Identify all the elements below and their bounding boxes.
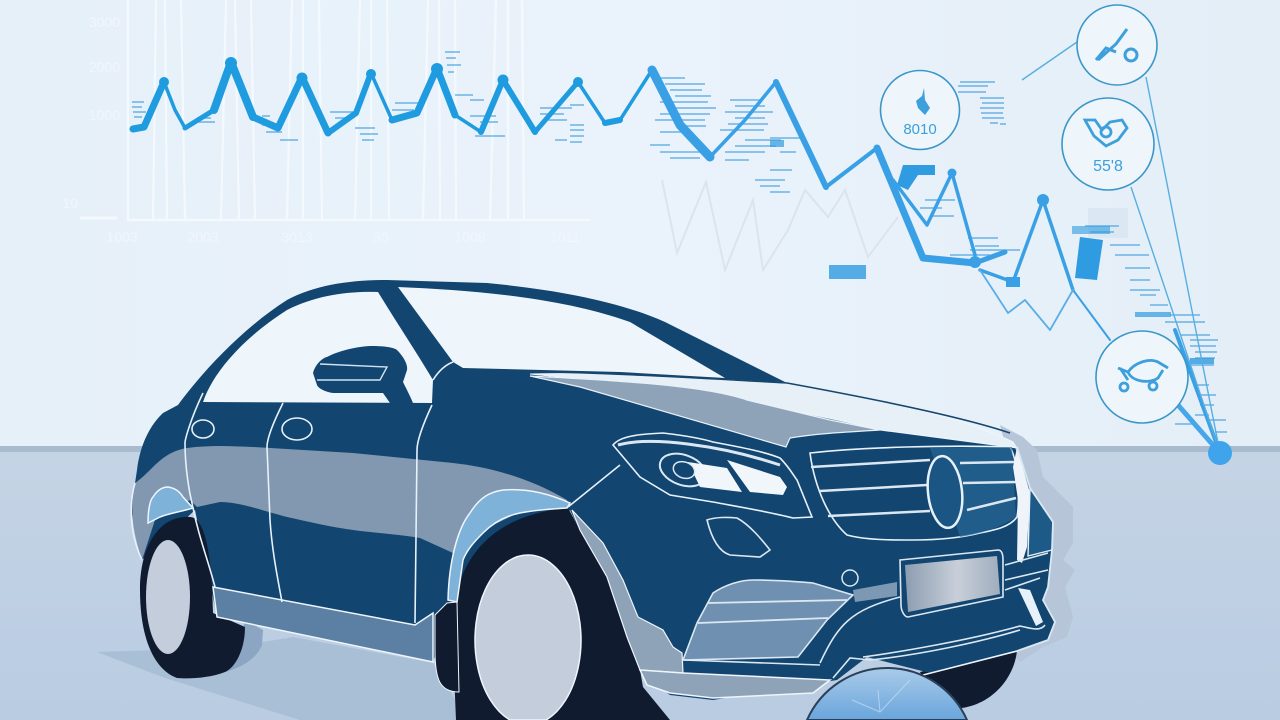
main declining line chart (133, 57, 1220, 453)
grille bars (811, 460, 1016, 516)
ghost line chart (662, 180, 898, 270)
callout circle: car underside (1096, 331, 1188, 423)
hood white (530, 374, 1017, 448)
chart: x axis labels: 1003 (106, 229, 138, 245)
front inner tire (435, 602, 459, 692)
sill (213, 587, 433, 662)
lower air intake (683, 580, 853, 660)
corner reflector (1018, 588, 1043, 626)
callout circle: wrench (1077, 5, 1157, 85)
chart: grid spikes and axes (80, 0, 590, 220)
hood gray (530, 376, 880, 447)
chart: y axis labels: 10 (62, 195, 78, 211)
peak markers (159, 57, 1049, 287)
chart: x axis labels (106, 229, 580, 245)
callout text: 8010 (903, 121, 937, 138)
grille highlight (930, 447, 1016, 537)
car (131, 280, 1055, 720)
front lower lip (640, 670, 830, 698)
license plate (900, 550, 1003, 617)
secondary line (893, 173, 975, 255)
lens highlight (852, 680, 910, 712)
chart: y axis labels: 1000 (89, 107, 120, 123)
rear quarter window (203, 292, 433, 403)
leader lines (1022, 42, 1220, 453)
floor (0, 446, 1280, 720)
icon: wrench (1096, 29, 1137, 61)
chart data blocks (770, 140, 1214, 364)
callout circle: 8010 (880, 70, 960, 150)
headlight white lens (727, 460, 787, 495)
rear wheel (140, 517, 245, 678)
headlight (613, 433, 812, 518)
chart: x axis labels: 1008 (454, 229, 486, 245)
front hub (475, 555, 581, 720)
bumper strip (853, 582, 897, 602)
car back shadow (1000, 425, 1075, 662)
floor shadow (97, 620, 467, 720)
chart: y axis labels (62, 14, 120, 211)
callout circle: engine (1062, 98, 1154, 190)
seasonal line base (133, 62, 652, 133)
outline lines lower (980, 270, 1073, 330)
fog vent (707, 517, 770, 557)
chart: x axis labels: 2003 (187, 229, 219, 245)
front arch (448, 490, 570, 602)
chart: y axis labels: 3000 (89, 14, 120, 30)
rear hub (146, 540, 190, 654)
chart: y axis labels: 2000 (89, 59, 120, 75)
rear arch (148, 487, 193, 523)
bumper lines (683, 447, 1055, 678)
parking sensor (842, 570, 858, 586)
icon: engine (1085, 120, 1127, 146)
grille (810, 446, 1018, 540)
front fender strip (572, 510, 683, 673)
mirror (313, 346, 413, 403)
hood top line (470, 370, 1010, 433)
falling line thick runs (652, 70, 1005, 263)
chart: x axis labels: 3013 (281, 229, 313, 245)
chart: x axis labels: 30 (373, 229, 389, 245)
emblem (924, 454, 966, 530)
final drop (1178, 405, 1220, 453)
car body (131, 280, 1055, 700)
headlight drl (618, 442, 780, 465)
end point marker (1208, 441, 1232, 465)
side gray band (132, 446, 568, 560)
chart data noise (132, 52, 1227, 432)
white side strip (1013, 447, 1030, 563)
far front wheel (920, 650, 1017, 708)
windshield (398, 287, 725, 378)
background wall (0, 0, 1280, 448)
door lines (131, 362, 620, 623)
projector (655, 448, 711, 492)
light panel behind block (1088, 208, 1128, 238)
callout text: 55'8 (1093, 158, 1123, 175)
front wheel (435, 508, 670, 720)
seasonal line thick runs (133, 62, 620, 133)
corner panel (1028, 488, 1053, 556)
magnifier lens at bottom edge (807, 668, 967, 720)
icon glyph (916, 88, 930, 115)
icon: underside (1118, 360, 1168, 391)
chart: x axis labels: 1011 (550, 229, 580, 245)
